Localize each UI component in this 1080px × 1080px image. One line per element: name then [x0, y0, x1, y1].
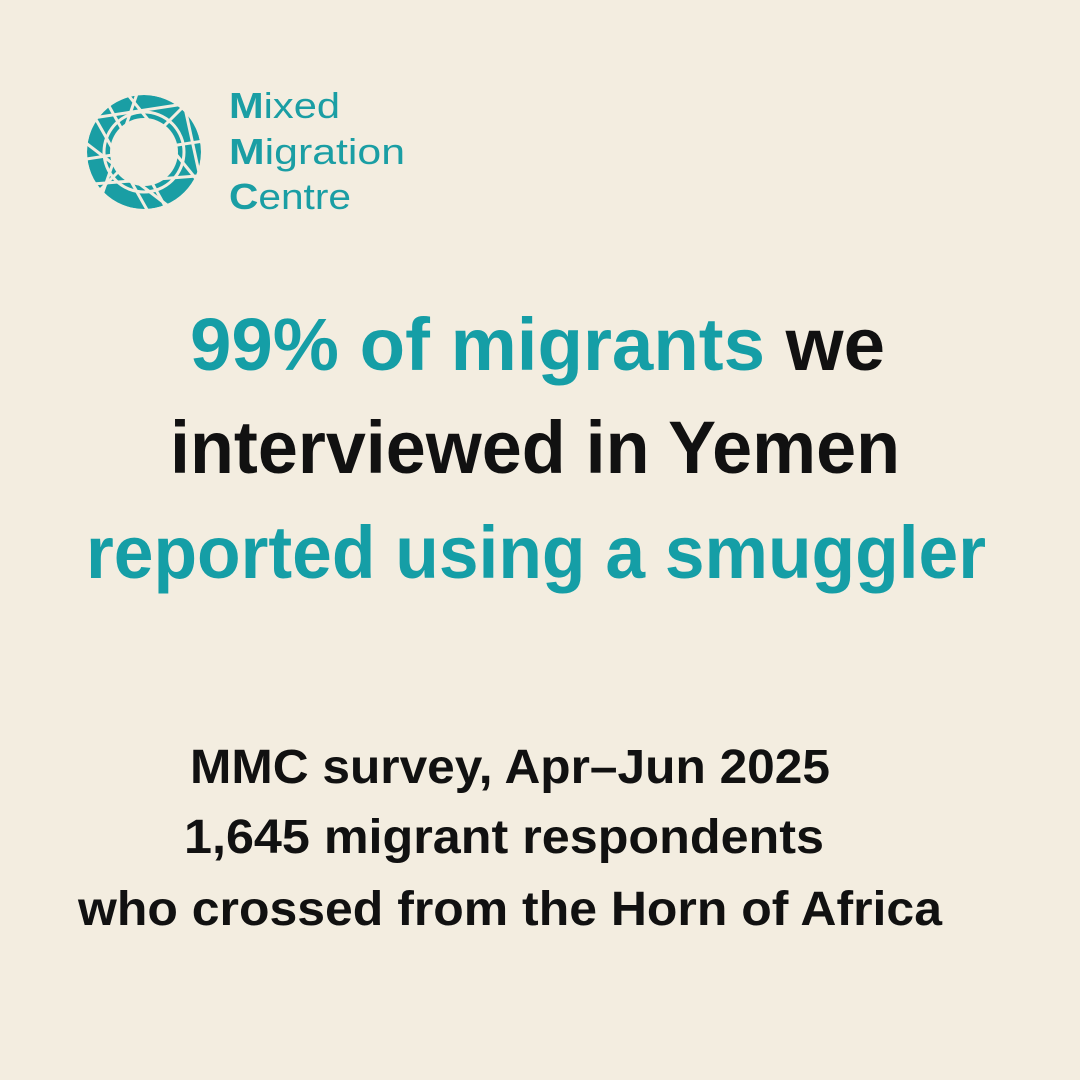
logo text: Centre — [229, 176, 351, 217]
source text block: 1,645 migrant respondents — [184, 811, 824, 864]
headline — [86, 303, 986, 594]
headline: 99% of migrants we — [190, 303, 885, 386]
logo — [87, 92, 402, 210]
headline: reported using a smuggler — [86, 511, 986, 594]
headline: interviewed in Yemen — [170, 406, 900, 489]
source text block — [77, 741, 942, 936]
logo text: Mixed — [229, 85, 340, 126]
logo text: Migration — [229, 131, 405, 172]
icon: logo ring — [87, 95, 201, 209]
logo text — [229, 85, 405, 217]
source text block: who crossed from the Horn of Africa — [77, 883, 942, 936]
source text block: MMC survey, Apr–Jun 2025 — [190, 741, 830, 794]
